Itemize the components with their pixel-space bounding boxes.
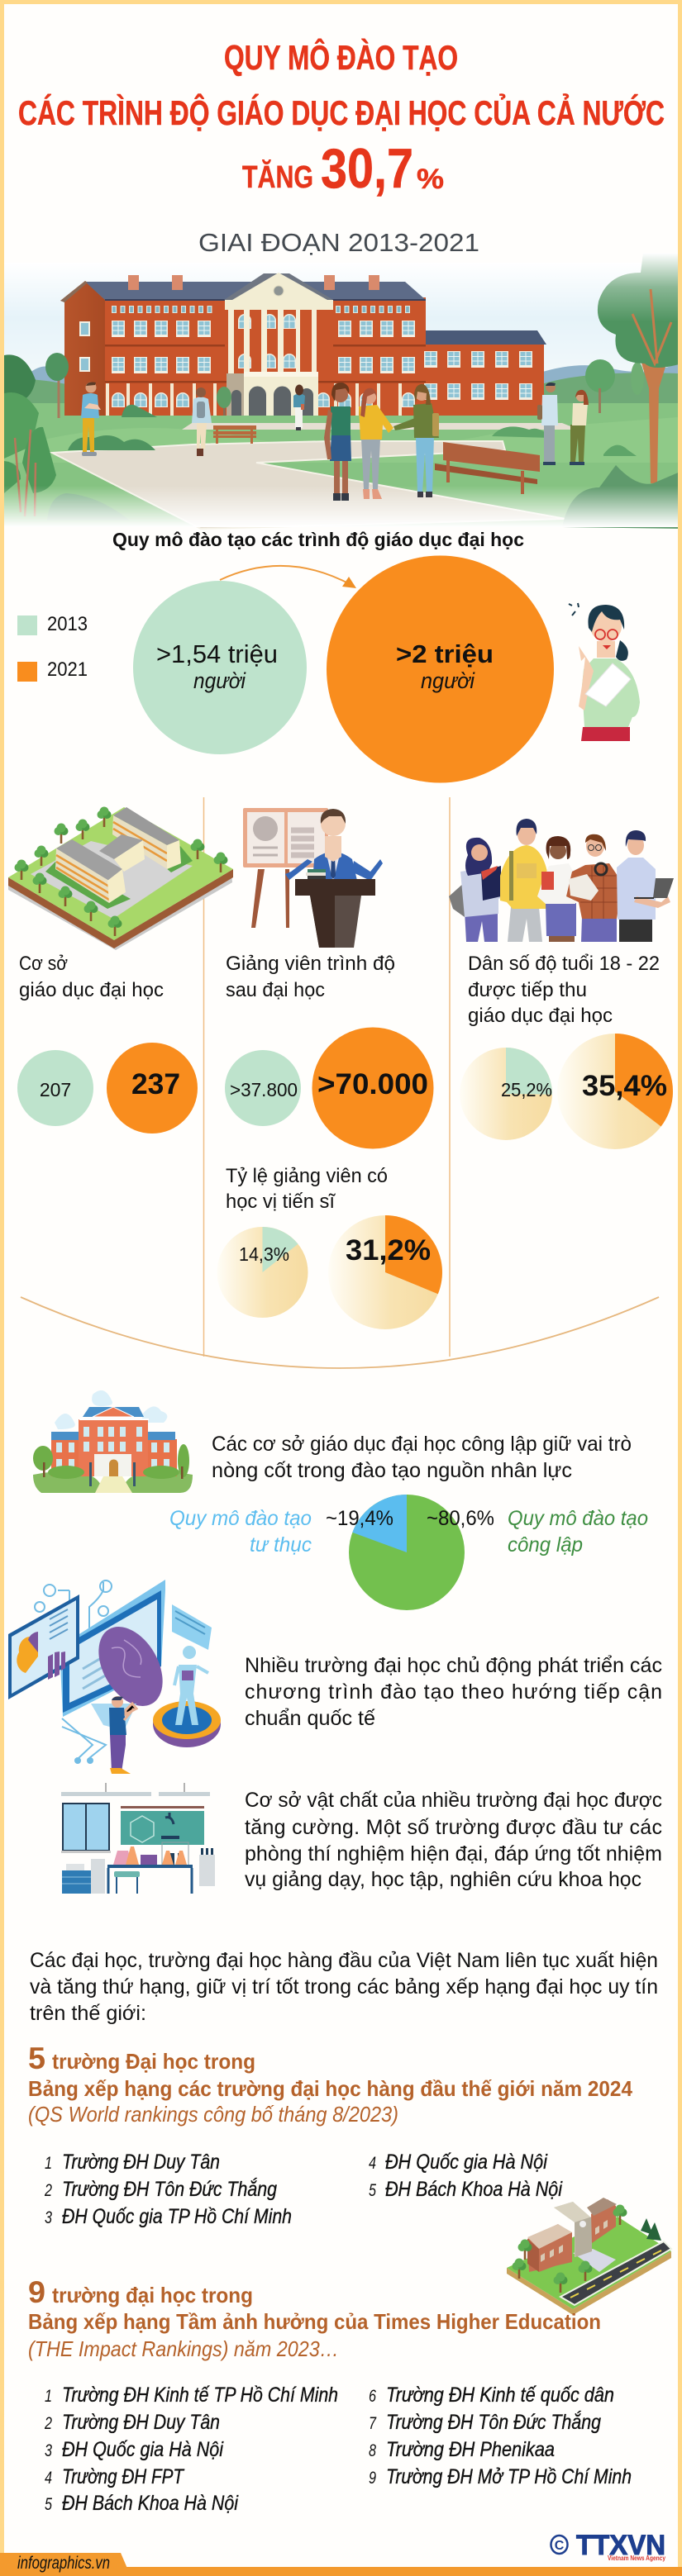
label: population: Dân số độ tuổi 18 - 22 (468, 953, 660, 975)
person with green top (324, 383, 351, 501)
heading: QS rankings: trường Đại học trong (52, 2049, 255, 2074)
legend: 2021 (47, 658, 88, 681)
scene bottom fade (0, 486, 682, 527)
list: QS universities: 5 (369, 2181, 376, 2200)
text: facilities: vụ giảng dạy, học tập, nghiên cứu khoa học (245, 1868, 641, 1891)
label: private scale (169, 1507, 312, 1557)
label: doctoral lecturers: học vị tiến sĩ (226, 1191, 336, 1213)
title (18, 37, 665, 200)
text: facilities: tăng cường. Một số trường được đầu tư các (245, 1816, 662, 1839)
title: 30,7 (321, 137, 413, 200)
icon: digital learning technology (8, 1580, 221, 1774)
list: QS universities: 4 (369, 2154, 376, 2173)
list: THE universities: 3 (45, 2441, 52, 2460)
text: international curriculum (245, 1654, 662, 1730)
pie 35,4% (557, 1034, 673, 1149)
circle 237 (107, 1043, 198, 1134)
circle 70.000 (312, 1028, 433, 1148)
list: THE universities: ĐH Bách Khoa Hà Nội (62, 2492, 239, 2515)
text: public institutions: Các cơ sở giáo dục đại học công lập giữ vai trò (212, 1433, 632, 1456)
person with backpack (192, 387, 212, 456)
list: THE universities: Trường ĐH Duy Tân (62, 2411, 220, 2434)
icon: teacher (569, 603, 640, 741)
circle 2013: người (193, 668, 246, 693)
list: THE universities: Trường ĐH Mở TP Hồ Chí Minh (386, 2465, 632, 2488)
text: international curriculum: Nhiều trường đại học chủ động phát triển các (245, 1654, 662, 1677)
text: rankings intro (30, 1949, 658, 2025)
label: population: được tiếp thu (468, 979, 587, 1001)
circle 2013: >1,54 triệu (156, 639, 278, 668)
logo: TTXVN: Vietnam News Agency (608, 2554, 665, 2562)
list: THE universities: 1 (45, 2387, 52, 2406)
icon: science laboratory (61, 1783, 215, 1894)
person with pale shirt (537, 383, 558, 465)
pie: public vs private: ~80,6% (427, 1507, 494, 1530)
label: private scale: tư thục (250, 1533, 312, 1557)
list: QS universities: Trường ĐH Tôn Đức Thắng (62, 2177, 277, 2201)
person with yellow trousers (81, 382, 101, 456)
pie: public vs private (326, 1495, 494, 1610)
list: QS universities: ĐH Quốc gia TP Hồ Chí Minh (62, 2205, 292, 2228)
campus scene illustration (0, 253, 682, 529)
person with yellow jacket (359, 388, 393, 499)
heading: THE rankings: Bảng xếp hạng Tầm ảnh hưởng của Times Higher Education (28, 2309, 601, 2334)
circle 2021: người (421, 668, 475, 693)
title: TĂNG (242, 159, 313, 195)
list: THE universities: 9 (369, 2469, 376, 2488)
label: public scale: công lập (508, 1533, 583, 1557)
pie 35,4%: 35,4% (582, 1070, 667, 1102)
panel: population 18-22 (449, 819, 674, 1149)
person walking away (293, 385, 305, 430)
column dividers (203, 797, 450, 1357)
circle 2013 (133, 581, 307, 754)
pie: public vs private: ~19,4% (326, 1507, 393, 1530)
list: THE universities: 4 (45, 2469, 52, 2488)
list: QS universities: 1 (45, 2154, 52, 2173)
footer band (0, 2553, 682, 2576)
circle 207: 207 (40, 1079, 71, 1100)
label: institutions: giáo dục đại học (19, 979, 164, 1001)
campus trees and bushes (4, 253, 682, 529)
heading: QS rankings: Bảng xếp hạng các trường đại học hàng đầu thế giới năm 2024 (28, 2076, 632, 2101)
list: THE universities: 8 (369, 2441, 376, 2460)
heading: QS rankings: (QS World rankings công bố tháng 8/2023) (28, 2102, 398, 2127)
circle 207 (17, 1050, 93, 1126)
title: QUY MÔ ĐÀO TẠO (224, 37, 458, 77)
label: postgraduate lecturers: Giảng viên trình độ (226, 953, 395, 975)
section heading: training scale: Quy mô đào tạo các trình độ giáo dục đại học (112, 529, 524, 550)
panel: lecturers (217, 808, 442, 1329)
circle 70.000: >70.000 (317, 1068, 428, 1100)
list: THE universities: ĐH Quốc gia Hà Nội (62, 2438, 224, 2461)
label: postgraduate lecturers: sau đại học (226, 979, 325, 1001)
campus path (52, 441, 565, 529)
subtitle: period: GIAI ĐOẠN 2013-2021 (198, 228, 479, 257)
list: QS universities: ĐH Bách Khoa Hà Nội (385, 2178, 563, 2201)
text: rankings intro: và tăng thứ hạng, giữ vị trí tốt trong các bảng xếp hạng đại học uy tín (30, 1975, 658, 1999)
list: QS universities (44, 2151, 563, 2228)
person with olive trousers (570, 390, 589, 465)
list: QS universities: ĐH Quốc gia Hà Nội (385, 2151, 548, 2174)
text: rankings intro: trên thế giới: (30, 2002, 146, 2025)
pie 31,2% (328, 1215, 442, 1329)
icon: campus isometric (8, 806, 233, 950)
circle 37.800: >37.800 (230, 1079, 298, 1100)
label: doctoral lecturers (226, 1165, 388, 1213)
icon: public university building (33, 1390, 193, 1493)
list: THE universities: Trường ĐH FPT (62, 2465, 184, 2488)
icon: presenter at podium (243, 808, 383, 948)
circle 237: 237 (131, 1068, 180, 1100)
title: % (417, 164, 444, 195)
person with olive shirt (393, 384, 439, 497)
list: THE universities (44, 2384, 632, 2515)
list: THE universities: 5 (45, 2495, 52, 2514)
list: QS universities: 3 (45, 2208, 52, 2227)
circle 37.800 (225, 1050, 301, 1126)
list: THE universities: 6 (369, 2387, 376, 2406)
text: public institutions (212, 1433, 632, 1482)
pie 14,3% (217, 1227, 308, 1318)
text: international curriculum: chương trình đào tạo theo hướng tiếp cận (245, 1680, 662, 1704)
heading: QS rankings: 5 (28, 2041, 45, 2075)
label: population: giáo dục đại học (468, 1005, 613, 1027)
text: public institutions: nòng cốt trong đào tạo nguồn nhân lực (212, 1459, 572, 1482)
pie 25,2% (460, 1048, 552, 1140)
label: public scale: Quy mô đào tạo (508, 1507, 648, 1530)
icon: university campus isometric (507, 2198, 671, 2315)
heading: QS rankings (28, 2041, 632, 2127)
circle 2021 (327, 555, 554, 783)
main building (60, 273, 546, 416)
text: facilities: Cơ sở vật chất của nhiều trường đại học được (245, 1789, 662, 1812)
label: public scale (508, 1507, 648, 1557)
text: facilities: phòng thí nghiệm hiện đại, đáp ứng tốt nhiệm (245, 1842, 662, 1865)
list: THE universities: Trường ĐH Kinh tế TP Hồ Chí Minh (62, 2384, 338, 2407)
label: private scale: Quy mô đào tạo (169, 1507, 312, 1530)
heading: THE rankings: (THE Impact Rankings) năm 2023… (28, 2336, 339, 2361)
heading: THE rankings: 9 (28, 2275, 45, 2309)
heading: THE rankings (28, 2275, 601, 2361)
label: postgraduate lecturers (226, 953, 395, 1001)
bench small (213, 425, 256, 444)
arrow 2013 to 2021 (220, 566, 356, 588)
logo: TTXVN: C (555, 2539, 565, 2553)
bench large (435, 442, 540, 494)
list: THE universities: Trường ĐH Kinh tế quốc dân (386, 2384, 614, 2407)
pie 14,3%: 14,3% (239, 1243, 289, 1265)
list: THE universities: Trường ĐH Phenikaa (386, 2438, 555, 2461)
heading: THE rankings: trường đại học trong (52, 2283, 253, 2307)
pie 25,2%: 25,2% (501, 1079, 552, 1100)
panel: higher-education institutions (8, 806, 233, 1134)
legend: 2013 (47, 613, 88, 635)
logo: TTXVN: TTXVN (576, 2530, 665, 2561)
label: population (468, 953, 660, 1027)
list: THE universities: 7 (369, 2414, 377, 2433)
text: rankings intro: Các đại học, trường đại học hàng đầu của Việt Nam liên tục xuất hiện (30, 1949, 658, 1972)
label: institutions: Cơ sở (19, 953, 68, 975)
label: doctoral lecturers: Tỷ lệ giảng viên có (226, 1165, 388, 1187)
list: THE universities: 2 (44, 2414, 52, 2433)
curved base line (21, 1297, 659, 1368)
pie 31,2%: 31,2% (346, 1234, 431, 1267)
list: QS universities: 2 (44, 2181, 52, 2200)
legend (17, 613, 88, 682)
list: QS universities: Trường ĐH Duy Tân (62, 2151, 220, 2174)
footer band: infographics.vn (17, 2554, 110, 2573)
text: international curriculum: chuẩn quốc tế (245, 1707, 375, 1730)
circle 2021: >2 triệu (396, 639, 494, 668)
text: facilities (245, 1789, 662, 1891)
icon: students group (449, 819, 674, 942)
label: institutions (19, 953, 164, 1001)
list: THE universities: Trường ĐH Tôn Đức Thắng (386, 2410, 601, 2434)
